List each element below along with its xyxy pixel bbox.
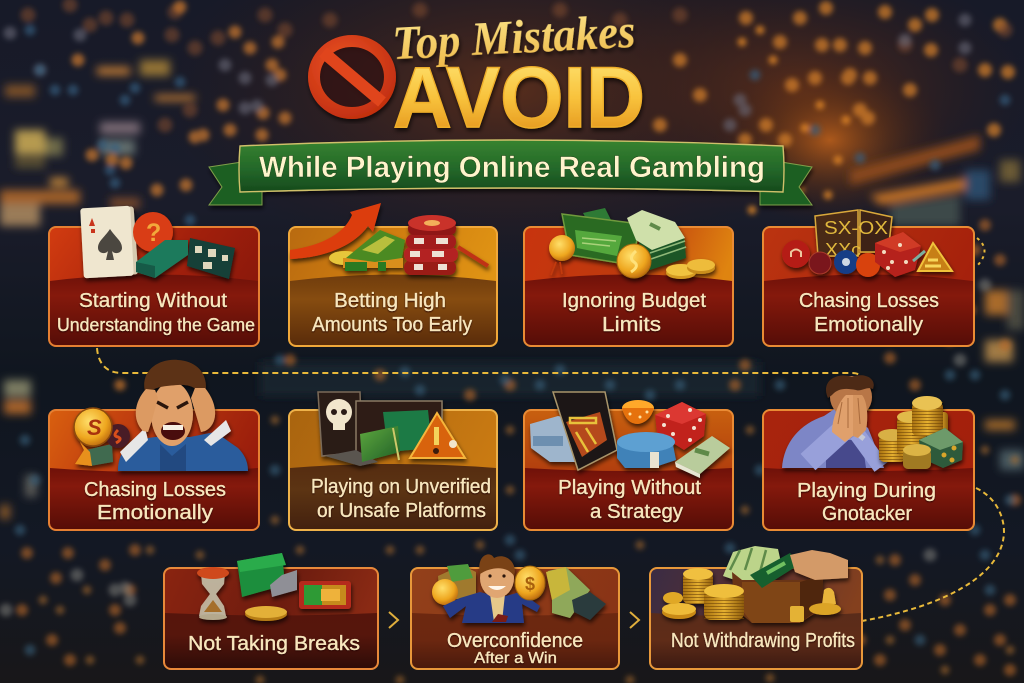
icon: coins and money pile	[74, 408, 130, 466]
icon: hourglass, green box, progress bar and coin	[197, 553, 351, 621]
card text: Betting High	[334, 290, 446, 312]
icon: rising arrow and chip stacks	[290, 203, 488, 275]
panel: playing during gnotacker: Gnotacker	[822, 503, 912, 525]
panel: betting high amounts too early: Amounts Too Early	[312, 314, 472, 336]
card text: Chasing Losses	[799, 290, 939, 312]
icon: skull screen, laptop, cash and warning triangle	[318, 392, 465, 466]
panel: playing on unverified or unsafe platforms	[289, 392, 497, 530]
panel: ignoring budget limits: Limits	[602, 314, 661, 336]
icon: score signs, balls, dice and warning	[782, 210, 952, 277]
card text: Starting Without	[79, 290, 227, 312]
icon: score signs, balls, dice and warning: XXc	[825, 240, 861, 260]
icon: score signs, balls, dice and warning: SX-OX	[824, 218, 888, 238]
icon: coins and money pile: S	[87, 415, 102, 440]
panel: overconfidence after a win: After a Win	[474, 650, 557, 667]
icon: playing cards, question ball and green dice	[80, 206, 235, 279]
icon: coin stacks and green die	[878, 396, 963, 469]
card text: Not Taking Breaks	[188, 633, 360, 655]
icon: confident man with coins and cash: $	[525, 574, 535, 594]
panel: starting without understanding the game: Understanding the Game	[57, 315, 255, 335]
icon: angry man gripping his head	[118, 360, 248, 471]
panel: starting without understanding the game	[49, 206, 259, 346]
dashed connector: right of card four	[977, 238, 984, 266]
title: top mistakes: Top Mistakes	[391, 5, 637, 70]
card text: Playing on Unverified	[311, 476, 491, 498]
icon: banknotes and gold coins	[549, 208, 715, 279]
icon: playing cards, question ball and green dice: ?	[146, 219, 161, 247]
icon: tablet, chips, dice and cash	[530, 392, 730, 478]
panel: ignoring budget limits	[524, 208, 733, 346]
panel: chasing losses emotionally, second row	[49, 360, 259, 530]
title: avoid: AVOID	[393, 50, 645, 146]
card text: Not Withdrawing Profits	[671, 630, 855, 652]
chevron between cards	[630, 612, 639, 628]
card text: Ignoring Budget	[562, 290, 706, 312]
panel: playing on unverified or unsafe platforms: or Unsafe Platforms	[317, 500, 486, 522]
icon: confident man with coins and cash	[432, 554, 606, 623]
card text: Chasing Losses	[84, 479, 226, 501]
panel: not withdrawing profits	[650, 546, 862, 669]
icon: prohibition sign	[314, 41, 390, 113]
card text: Playing Without	[558, 477, 701, 499]
panel: playing without a strategy: a Strategy	[590, 501, 683, 523]
title block	[314, 5, 645, 146]
chevron between cards	[389, 612, 398, 628]
icon: man covering his face	[782, 375, 884, 468]
dashed connector: row two to row three	[862, 488, 1004, 621]
dashed connector: row one to row two	[97, 348, 861, 378]
icon: coins, treasure chest, cash and hand	[662, 546, 848, 623]
panel: chasing losses emotionally, top row	[763, 210, 974, 346]
ribbon text: While Playing Online Real Gambling	[259, 151, 765, 184]
ribbon banner	[209, 140, 812, 205]
card text: Playing During	[797, 480, 936, 502]
panel: playing without a strategy	[524, 392, 733, 530]
panel: chasing losses emotionally, top row: Emotionally	[814, 314, 923, 336]
panel: not taking breaks	[164, 553, 378, 669]
panel: playing during gnotacker	[763, 375, 974, 530]
panel: chasing losses emotionally, second row: Emotionally	[97, 502, 213, 524]
card text: Overconfidence	[447, 630, 583, 652]
panel: overconfidence after a win	[411, 554, 619, 669]
panel: betting high amounts too early	[289, 203, 497, 346]
